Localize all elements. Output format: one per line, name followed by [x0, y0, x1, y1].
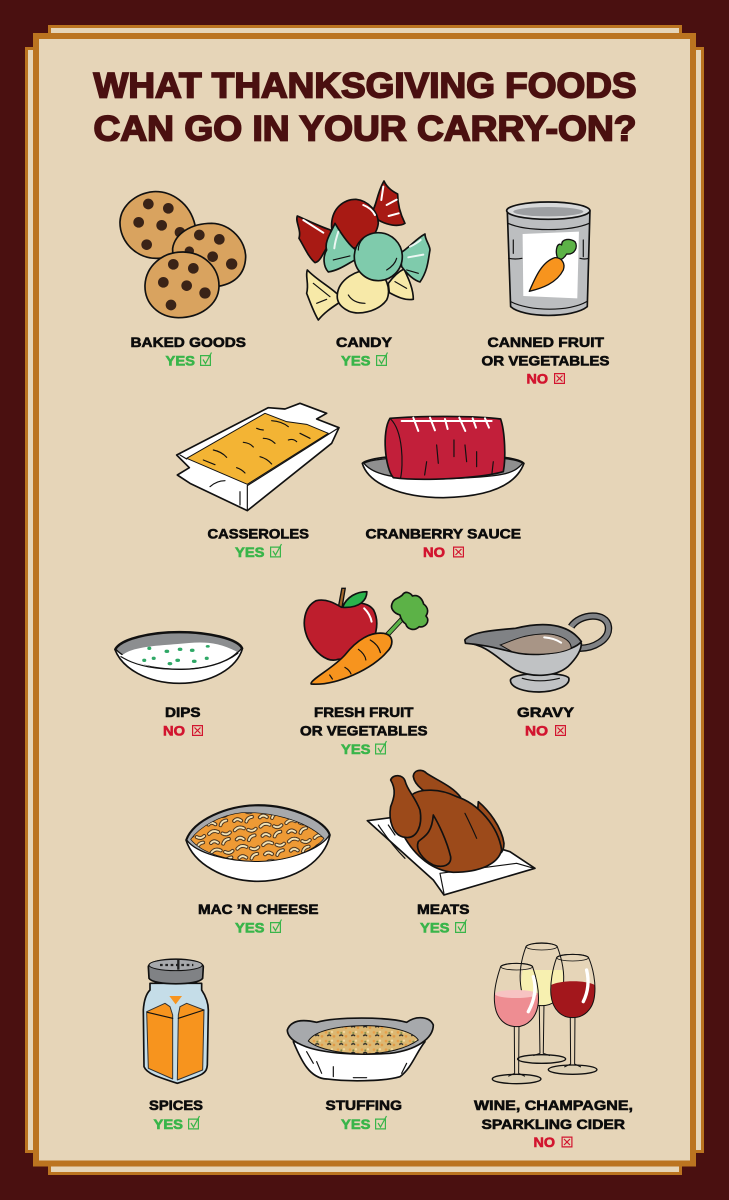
- label: dips: DIPS: [165, 704, 200, 720]
- label: canned fruit or vegetables: CANNED FRUIT: [488, 334, 604, 350]
- icon: three wine glasses: [492, 943, 597, 1084]
- icon: roast turkey on platter: [367, 770, 535, 895]
- icon: candy: [297, 181, 430, 320]
- label: spices: SPICES: [149, 1097, 203, 1113]
- label: gravy: [517, 704, 575, 738]
- label: casseroles: [208, 526, 309, 560]
- icon: stuffing dish: [287, 1018, 433, 1081]
- label: wine, champagne, sparkling cider: WINE, CHAMPAGNE,: [474, 1097, 633, 1113]
- label: fresh fruit or vegetables: FRESH FRUIT: [314, 704, 414, 720]
- label: dips: [163, 704, 202, 738]
- label: casseroles: CASSEROLES: [208, 526, 309, 542]
- title: CAN GO IN YOUR CARRY-ON?: [94, 110, 636, 148]
- label: spices: [149, 1097, 203, 1132]
- label: dips: NO: [163, 722, 185, 738]
- icon: casserole dish: [177, 403, 339, 511]
- label: stuffing: STUFFING: [326, 1097, 402, 1113]
- label: candy: [336, 334, 393, 368]
- label: cranberry sauce: [366, 526, 521, 560]
- label: wine, champagne, sparkling cider: [474, 1097, 633, 1150]
- label: meats: [417, 901, 470, 936]
- label: spices: YES: [154, 1116, 183, 1132]
- label: stuffing: [326, 1097, 402, 1132]
- icon: cranberry sauce on plate: [362, 416, 524, 498]
- label: meats: MEATS: [417, 901, 470, 917]
- label: gravy: GRAVY: [517, 704, 575, 720]
- icon: cookies: [120, 192, 246, 318]
- label: wine, champagne, sparkling cider: SPARKLING CIDER: [482, 1116, 625, 1132]
- label: baked goods: BAKED GOODS: [130, 334, 246, 350]
- label: candy: YES: [341, 352, 370, 368]
- label: casseroles: YES: [235, 544, 264, 560]
- icon: gravy boat: [465, 616, 609, 692]
- label: baked goods: YES: [166, 352, 195, 368]
- title: [94, 66, 636, 148]
- label: wine, champagne, sparkling cider: NO: [534, 1134, 555, 1150]
- label: canned fruit or vegetables: OR VEGETABLES: [482, 352, 610, 368]
- label: stuffing: YES: [341, 1116, 370, 1132]
- label: mac 'n cheese: MAC ’N CHEESE: [198, 901, 318, 917]
- label: canned fruit or vegetables: NO: [526, 370, 548, 386]
- icon: mac and cheese bowl: [186, 805, 330, 881]
- label: canned fruit or vegetables: [482, 334, 610, 386]
- icon: apple and carrot: [304, 588, 428, 684]
- label: baked goods: [130, 334, 246, 368]
- label: mac 'n cheese: YES: [235, 920, 264, 936]
- label: mac 'n cheese: [198, 901, 318, 936]
- label: meats: YES: [420, 920, 450, 936]
- label: cranberry sauce: CRANBERRY SAUCE: [366, 526, 521, 542]
- label: gravy: NO: [525, 722, 548, 738]
- icon: spice jar: [143, 959, 208, 1083]
- label: cranberry sauce: NO: [423, 544, 445, 560]
- label: candy: CANDY: [336, 334, 393, 350]
- icon: canned carrot: [507, 202, 590, 315]
- label: fresh fruit or vegetables: YES: [341, 741, 370, 757]
- label: fresh fruit or vegetables: OR VEGETABLES: [300, 722, 428, 738]
- title: WHAT THANKSGIVING FOODS: [94, 66, 636, 106]
- label: fresh fruit or vegetables: [300, 704, 428, 757]
- icon: dip bowl: [115, 632, 243, 683]
